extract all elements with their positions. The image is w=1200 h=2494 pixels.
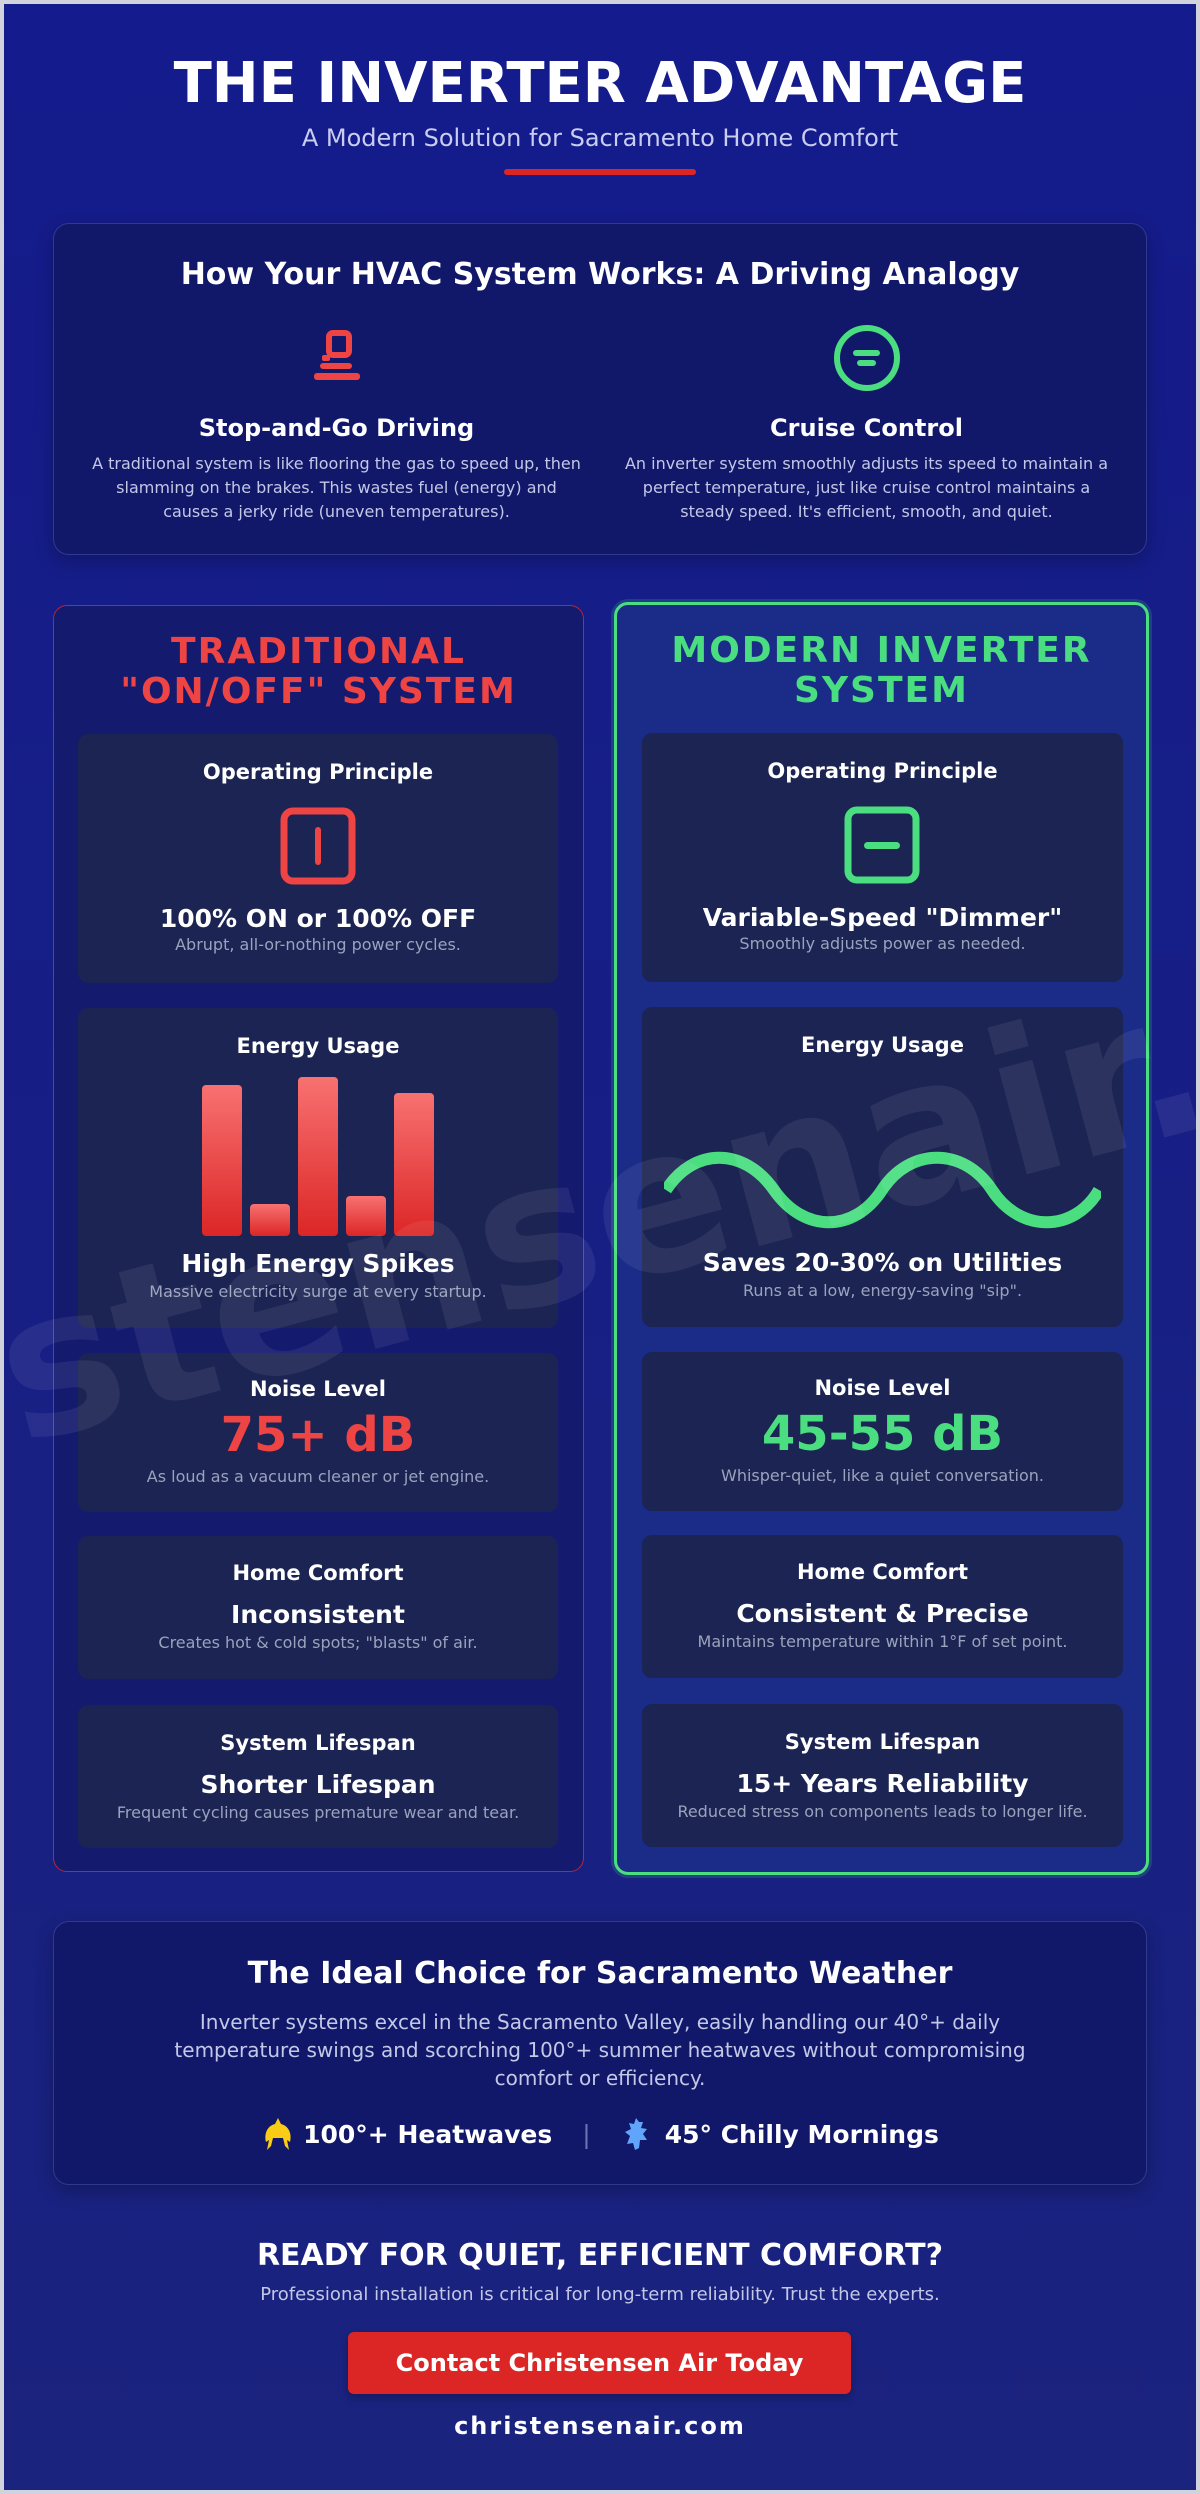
- right column: cruise control: [625, 414, 1108, 521]
- CTA button: Contact Christensen Air Today: [396, 2349, 803, 2377]
- weather paragraph: comfort or efficiency.: [495, 2066, 705, 2090]
- right column: cruise control: Cruise Control: [770, 414, 963, 442]
- card: operating principle: Operating Principle: [767, 759, 998, 783]
- bar chart: energy spikes: [202, 1077, 434, 1236]
- card: system lifespan: System Lifespan: [220, 1731, 416, 1755]
- icon: cruise control: [834, 325, 900, 391]
- card: energy usage: Saves 20-30% on Utilities: [703, 1248, 1062, 1277]
- CTA subtext: Professional installation is critical for long-term reliability. Trust the experts.: [260, 2284, 940, 2305]
- analogy heading: How Your HVAC System Works: A Driving Analogy: [181, 257, 1019, 292]
- panel: driving analogy: [53, 223, 1147, 555]
- left column: stop and go: Stop-and-Go Driving: [199, 414, 474, 442]
- chart: smooth wave: [664, 1152, 1101, 1228]
- card: home comfort: Home Comfort: [232, 1561, 404, 1585]
- card: noise level: 45-55 dB: [762, 1406, 1003, 1462]
- right column: cruise control: An inverter system smoothly adjusts its speed to maintain a: [625, 454, 1108, 473]
- left column: stop and go: causes a jerky ride (uneven temperatures).: [163, 502, 510, 521]
- card: home comfort: Consistent & Precise: [736, 1599, 1029, 1628]
- traditional heading: TRADITIONAL: [171, 631, 466, 672]
- card: home comfort: [78, 1536, 558, 1679]
- left column: stop and go: A traditional system is like flooring the gas to speed up, then: [92, 454, 581, 473]
- card: system lifespan: Reduced stress on components leads to longer life.: [677, 1802, 1088, 1821]
- inverter heading: MODERN INVERTER: [671, 630, 1092, 671]
- card: energy usage: Energy Usage: [237, 1034, 399, 1058]
- right column: cruise control: perfect temperature, just like cruise control maintains a: [643, 478, 1090, 497]
- icon: dimmer switch: [844, 806, 920, 884]
- weather highlights: 45° Chilly Mornings: [665, 2120, 939, 2148]
- card: noise level: [78, 1353, 558, 1512]
- card: home comfort: Inconsistent: [231, 1600, 405, 1629]
- subtitle: A Modern Solution for Sacramento Home Comfort: [302, 124, 898, 152]
- icon: sun: [265, 2118, 291, 2150]
- inverter heading: [671, 630, 1092, 711]
- card: system lifespan: Frequent cycling causes premature wear and tear.: [117, 1803, 519, 1822]
- card: noise level: 75+ dB: [221, 1407, 415, 1463]
- card: noise level: As loud as a vacuum cleaner or jet engine.: [147, 1467, 489, 1486]
- card: noise level: Whisper-quiet, like a quiet conversation.: [721, 1466, 1044, 1485]
- card: system lifespan: 15+ Years Reliability: [736, 1769, 1029, 1798]
- weather highlights: 100°+ Heatwaves: [303, 2120, 552, 2148]
- CTA heading: READY FOR QUIET, EFFICIENT COMFORT?: [257, 2238, 943, 2273]
- card: system lifespan: [78, 1705, 558, 1848]
- card: noise level: Noise Level: [814, 1376, 950, 1400]
- card: operating principle: Smoothly adjusts power as needed.: [739, 934, 1026, 953]
- traditional heading: "ON/OFF" SYSTEM: [120, 671, 517, 712]
- card: operating principle: [78, 734, 558, 983]
- weather paragraph: temperature swings and scorching 100°+ summer heatwaves without compromising: [174, 2038, 1026, 2062]
- title: THE INVERTER ADVANTAGE: [174, 51, 1026, 116]
- card: operating principle: 100% ON or 100% OFF: [160, 904, 476, 933]
- card: noise level: [642, 1352, 1123, 1511]
- CTA button: [348, 2332, 851, 2394]
- card: energy usage: Energy Usage: [801, 1033, 964, 1057]
- card: operating principle: Abrupt, all-or-nothing power cycles.: [175, 935, 461, 954]
- card: operating principle: Operating Principle: [203, 760, 433, 784]
- traditional heading: [120, 631, 517, 712]
- card: energy usage: High Energy Spikes: [181, 1249, 455, 1278]
- left column: stop and go: slamming on the brakes. This wastes fuel (energy) and: [116, 478, 557, 497]
- inverter heading: SYSTEM: [794, 670, 969, 711]
- left column: stop and go: [92, 414, 581, 521]
- icon: on switch: [280, 808, 356, 884]
- weather heading: The Ideal Choice for Sacramento Weather: [248, 1956, 952, 1991]
- card: operating principle: Variable-Speed "Dimmer": [703, 903, 1062, 932]
- right column: cruise control: steady speed. It's efficient, smooth, and quiet.: [680, 502, 1053, 521]
- panel: sacramento weather: [53, 1921, 1147, 2185]
- card: home comfort: Home Comfort: [797, 1560, 968, 1584]
- website url: christensenair.com: [454, 2412, 746, 2440]
- weather paragraph: [174, 2010, 1026, 2090]
- icon: snowflake: [625, 2118, 647, 2150]
- red underline: [504, 169, 696, 175]
- card: energy usage: [78, 1008, 558, 1328]
- card: home comfort: [642, 1535, 1123, 1678]
- weather paragraph: Inverter systems excel in the Sacramento Valley, easily handling our 40°+ daily: [200, 2010, 1000, 2034]
- card: system lifespan: Shorter Lifespan: [200, 1770, 436, 1799]
- card: noise level: Noise Level: [250, 1377, 386, 1401]
- card: energy usage: [642, 1007, 1123, 1327]
- card: operating principle: [642, 733, 1123, 982]
- card: home comfort: Maintains temperature within 1°F of set point.: [698, 1632, 1067, 1651]
- card: system lifespan: System Lifespan: [785, 1730, 980, 1754]
- weather highlights: |: [582, 2120, 591, 2148]
- panel: modern inverter system: [614, 602, 1149, 1875]
- card: energy usage: Massive electricity surge at every startup.: [149, 1282, 487, 1301]
- card: system lifespan: [642, 1704, 1123, 1847]
- weather highlights: [265, 2118, 939, 2150]
- card: energy usage: Runs at a low, energy-saving "sip".: [743, 1281, 1022, 1300]
- icon: brake pedal: [314, 330, 360, 380]
- card: home comfort: Creates hot & cold spots; "blasts" of air.: [158, 1633, 478, 1652]
- panel: traditional system: [53, 605, 584, 1872]
